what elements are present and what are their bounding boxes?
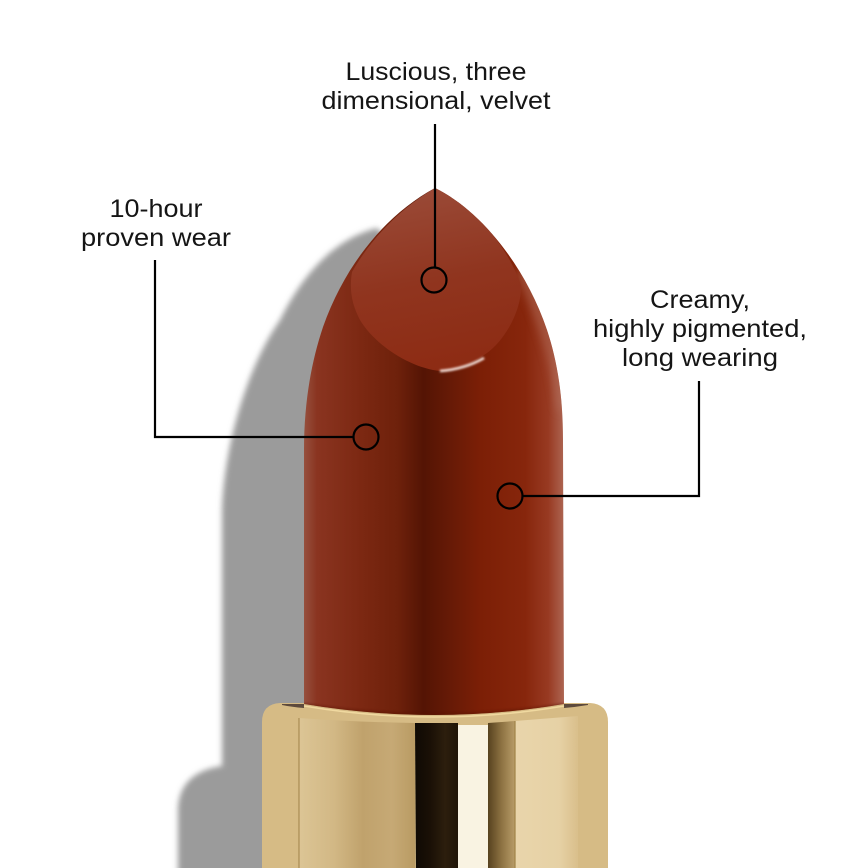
brown reflection band xyxy=(488,721,515,868)
rim highlight xyxy=(304,706,564,717)
bullet body xyxy=(300,180,570,740)
white reflection band xyxy=(458,725,488,868)
lipstick infographic xyxy=(82,62,804,868)
tube inner rim xyxy=(282,704,588,708)
gold tube xyxy=(262,703,608,868)
leader line: creamy xyxy=(523,381,699,496)
highlight on facet edge xyxy=(440,358,484,371)
callout: wear xyxy=(81,195,378,450)
marker: wear xyxy=(354,424,378,450)
left panel xyxy=(299,718,415,868)
label: velvet: dimensional, velvet xyxy=(322,87,551,115)
label: wear: proven wear xyxy=(81,224,231,252)
label: creamy: Creamy, xyxy=(650,286,750,314)
label: wear: 10-hour xyxy=(110,195,202,223)
label: wear xyxy=(81,195,231,252)
label: creamy: long wearing xyxy=(622,344,778,372)
label: creamy: highly pigmented, xyxy=(593,315,807,343)
leader line: wear xyxy=(155,260,353,437)
label: creamy xyxy=(593,286,807,372)
slanted facet xyxy=(351,188,521,371)
tube outer shell xyxy=(262,703,608,868)
shoulder highlight xyxy=(521,270,563,410)
drop shadow xyxy=(178,228,450,868)
right panel xyxy=(515,716,578,868)
label: velvet xyxy=(322,58,551,115)
callout: velvet xyxy=(322,58,551,292)
dark reflection band xyxy=(415,723,458,868)
marker: creamy xyxy=(498,484,522,508)
base shading xyxy=(304,706,564,716)
leader line: velvet xyxy=(434,124,436,267)
lipstick bullet xyxy=(300,180,570,740)
marker: velvet xyxy=(422,268,446,292)
label: velvet: Luscious, three xyxy=(346,58,526,86)
callout: creamy xyxy=(498,286,807,508)
